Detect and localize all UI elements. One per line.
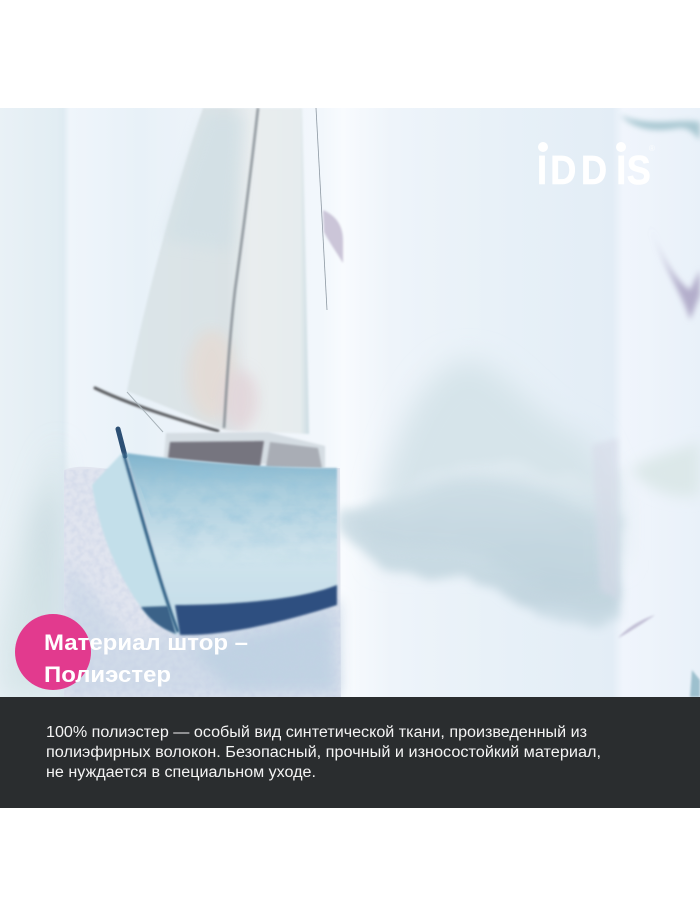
sail tint [232,124,241,157]
sail warm tint [188,330,236,420]
description text [46,724,601,781]
stem post [118,429,125,456]
hull dark stripe [175,585,337,635]
curtain fabric [0,108,700,697]
heading: Материал штор – [44,630,248,655]
left blurred fold [0,484,64,696]
hull illustration [92,429,337,636]
boom rope [127,392,163,432]
sail illustration [95,108,327,468]
watercolor sea [64,467,341,697]
pink circle accent [15,614,91,690]
sail [127,108,309,434]
cabin window [168,441,264,467]
heading: Полиэстер [44,662,171,687]
cabin [164,432,325,468]
logo: IDDIS: IDDIS [537,148,651,194]
description text: 100% полиэстер — особый вид синтетической ткани, произведенный из [46,724,587,741]
cabin side [266,442,322,468]
boom [95,388,218,431]
keel line [124,455,178,632]
lilac flag shape [323,210,343,263]
watercolor cloud [339,500,626,630]
right lower foliage [635,446,699,496]
lilac cloud edge [596,442,617,594]
logo: IDDIS: ® [649,144,655,153]
mast seam [224,108,258,428]
description text: не нуждается в специальном уходе. [46,764,316,781]
top right bird [620,115,700,140]
lower right bird [618,615,655,638]
description text: полиэфирных волокон. Безопасный, прочный и износостойкий материал, [46,744,601,761]
hull main [126,453,337,634]
right bird [660,253,700,320]
hull bow side [92,452,167,608]
hull bow dark [141,606,176,634]
cloud haze [374,360,594,500]
cloud core [364,480,590,540]
hull wash texture [142,486,337,549]
panel: curtain photo [0,108,700,697]
rigging line [316,108,327,310]
heading [44,630,248,687]
description band [0,697,700,808]
sail pink tint [229,372,260,429]
